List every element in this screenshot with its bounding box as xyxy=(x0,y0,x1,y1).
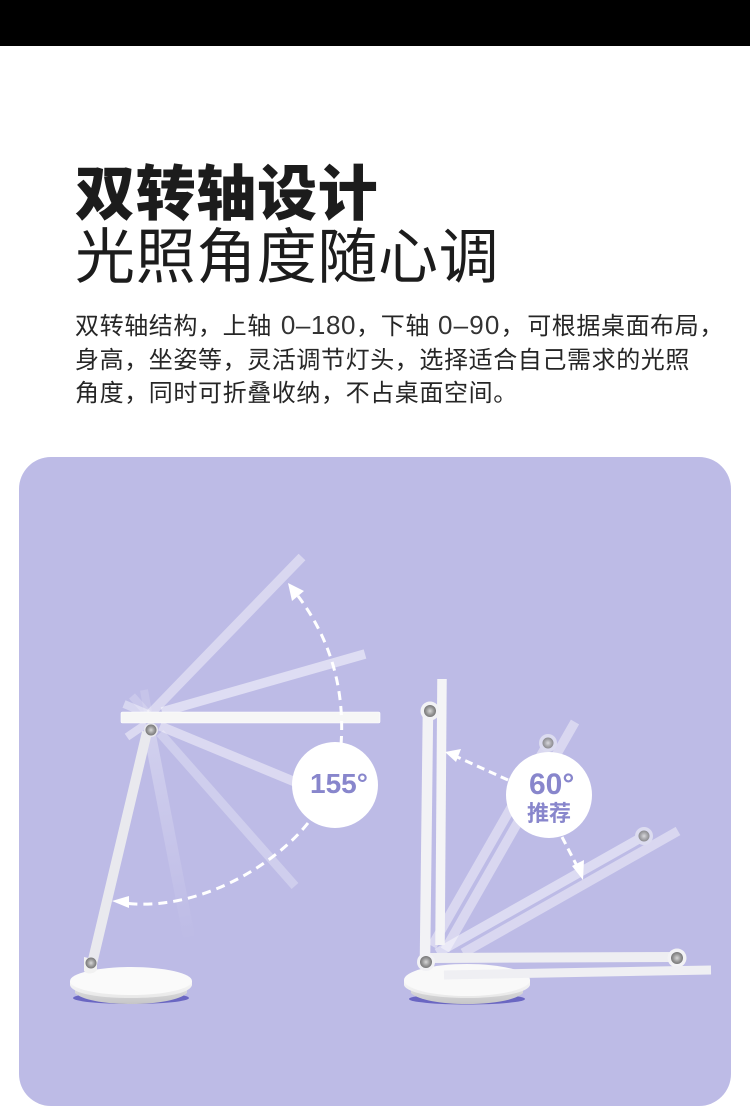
panel: lavender background xyxy=(19,457,731,1106)
lowered horizontal arm xyxy=(430,948,686,968)
title line 1: 双转轴设计 xyxy=(75,161,378,228)
dashed arc arrow, upper xyxy=(288,583,342,745)
badge: 155 degrees: 155° xyxy=(310,768,368,799)
badge: 60 degrees recommended xyxy=(506,752,592,838)
upper pivot xyxy=(420,702,440,720)
lamp base xyxy=(404,964,530,1004)
ghost position, lowered xyxy=(437,827,678,953)
ghost position, raised about 60 degrees xyxy=(432,722,575,950)
badge: 60 degrees recommended: 60° xyxy=(529,768,574,801)
lower pivot xyxy=(417,953,435,971)
left lamp xyxy=(70,557,380,1004)
description text: 角度，同时可折叠收纳，不占桌面空间。 xyxy=(75,380,518,407)
upright arm xyxy=(425,708,428,958)
badge: 155 degrees xyxy=(292,742,378,828)
description text: 身高，坐姿等，灵活调节灯头，选择适合自己需求的光照 xyxy=(75,347,690,374)
lowered horizontal head xyxy=(444,970,711,975)
description text xyxy=(75,310,724,407)
upright head xyxy=(440,679,442,945)
arm pivot xyxy=(144,723,158,737)
dashed arrow, down xyxy=(562,837,584,880)
dashed arrow, up to upright xyxy=(445,749,508,780)
description text: 双转轴结构，上轴 0–180，下轴 0–90，可根据桌面布局， xyxy=(75,310,724,340)
title line 2: 光照角度随心调 xyxy=(75,224,499,291)
badge: 60 degrees recommended: 推荐 xyxy=(527,801,571,826)
lamp head xyxy=(121,712,380,723)
top black bar xyxy=(0,0,750,46)
lamp arm xyxy=(92,732,147,964)
dashed arc arrow, lower xyxy=(112,823,308,908)
lamp base xyxy=(70,957,192,1004)
right lamp xyxy=(404,679,711,1004)
ghost positions of the lamp head xyxy=(124,557,365,942)
